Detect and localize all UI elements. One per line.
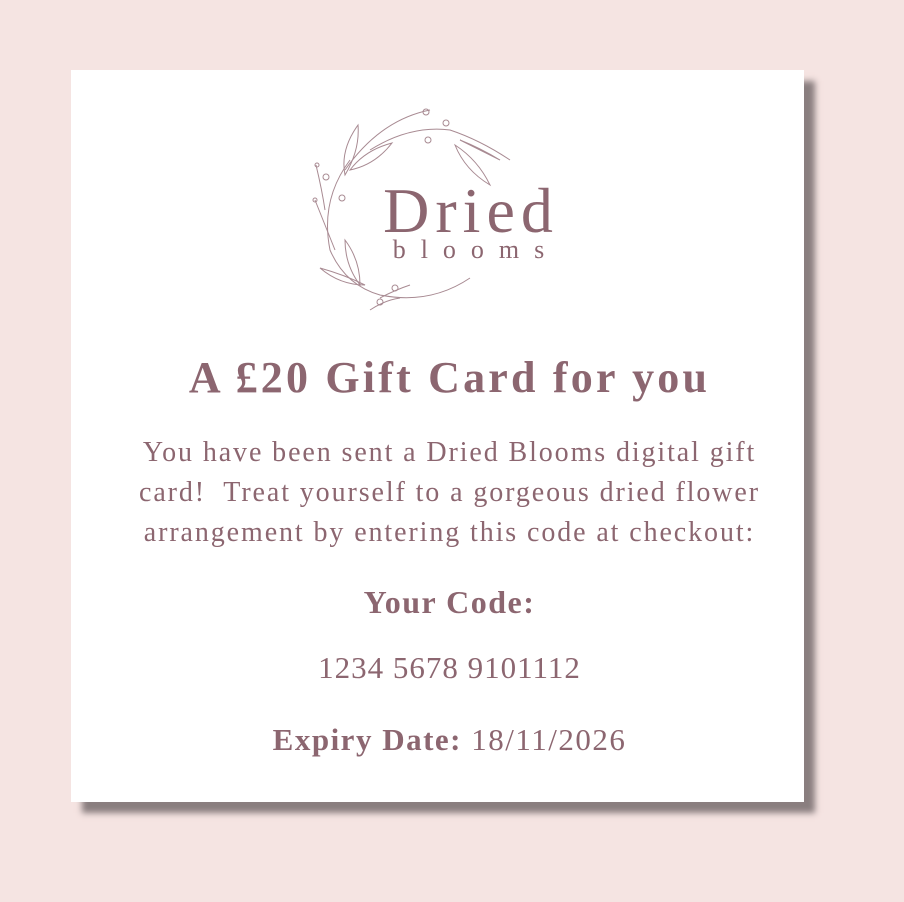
title: A £20 Gift Card for you (189, 353, 710, 402)
logo: Dried Blooms wreath (312, 108, 559, 310)
text block: message: card! Treat yourself to a gorgeous dried flower (139, 477, 760, 508)
heading: your code: Your Code: (364, 584, 535, 620)
text block: message (139, 437, 760, 548)
text block: message: arrangement by entering this code at checkout: (144, 517, 755, 548)
logo: Dried Blooms wreath: Dried (383, 175, 559, 246)
text block: expiry date: Expiry Date: 18/11/2026 (273, 722, 626, 757)
text block: code: 1234 5678 9101112 (318, 650, 581, 685)
logo: Dried Blooms wreath: blooms (393, 235, 559, 264)
panel: gift card (71, 70, 804, 802)
text block: message: You have been sent a Dried Blooms digital gift (143, 437, 756, 468)
